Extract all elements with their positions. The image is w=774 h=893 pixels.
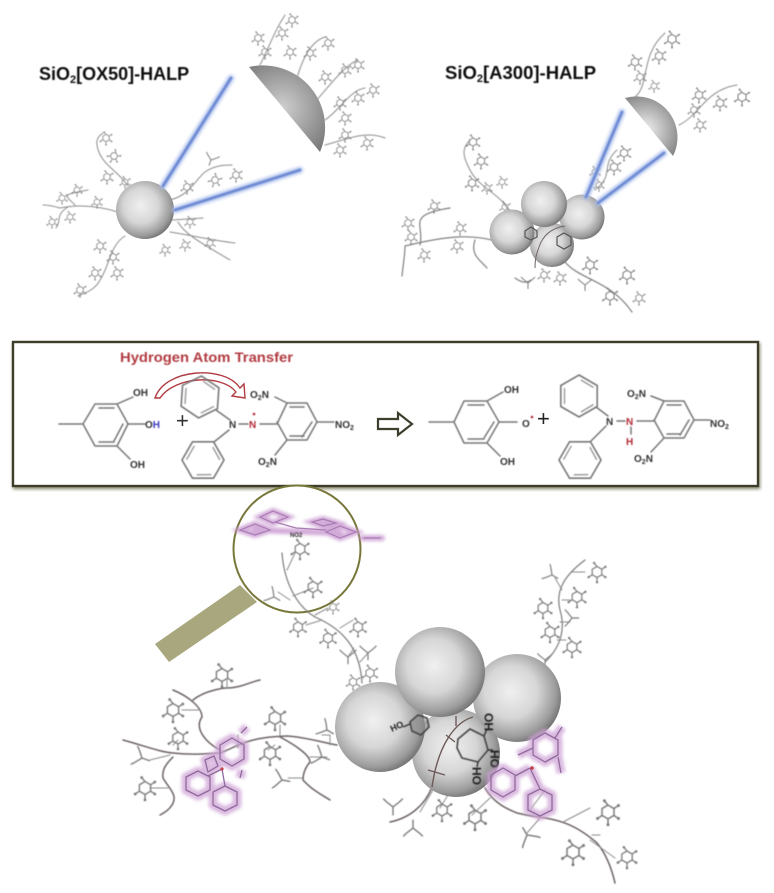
product: DPPH-H: N: [626, 417, 633, 428]
reactant: DPPH radical: N: [262, 390, 269, 401]
panel: magnified aggregate: [123, 486, 637, 883]
product: gallol radical: OH: [500, 457, 515, 468]
polymer chains around aggregate: [402, 30, 750, 312]
reactant: DPPH radical: NO: [335, 420, 350, 431]
heading: SiO2[OX50]-HALP: SiO: [39, 64, 70, 84]
product: DPPH-H: 2: [642, 459, 646, 466]
reactant: DPPH radical: N: [270, 457, 277, 468]
polymer chains on hemisphere: [252, 13, 385, 158]
reactant: gallol: OH: [145, 420, 160, 431]
product: DPPH-H: N: [639, 389, 646, 400]
heading: Hydrogen Atom Transfer: Hydrogen Atom Transfer: [120, 349, 294, 365]
silica aggregate: [490, 181, 604, 268]
reaction arrow: [378, 413, 412, 435]
reactant: DPPH radical: 2: [266, 462, 270, 469]
product: DPPH-H: N: [606, 417, 613, 428]
plus sign: +: [176, 408, 189, 433]
highlighted DPPH in lens: [240, 511, 382, 538]
plus sign: +: [537, 406, 550, 431]
gallol on aggregate: [457, 713, 502, 785]
left polymer network: [123, 663, 338, 815]
right polymer chains: [383, 560, 637, 883]
reactant: DPPH radical: N: [249, 420, 256, 431]
reactant: gallol: OH: [133, 388, 148, 399]
polymer chain through lens: [264, 533, 378, 691]
light beams: [586, 112, 664, 203]
magnifying glass: [155, 486, 360, 662]
reactant: DPPH radical: 2: [350, 425, 354, 432]
light beams: [163, 78, 300, 210]
reactant: DPPH radical: 2: [258, 395, 262, 402]
product: gallol radical: [429, 385, 533, 468]
heading: SiO2[OX50]-HALP: 2: [70, 74, 76, 86]
product: DPPH-H: H: [626, 437, 633, 448]
product: gallol radical: O: [522, 419, 530, 430]
silica aggregate, large: [335, 627, 561, 797]
gallol on aggregate: HO: [482, 713, 496, 731]
product: gallol radical: OH: [504, 385, 519, 396]
product: DPPH-H: NO: [710, 419, 725, 430]
reactant: gallol: [59, 388, 160, 471]
reactant: DPPH radical: N: [229, 420, 236, 431]
hemisphere detector: [249, 65, 325, 152]
curved transfer arrow: [155, 373, 245, 398]
product: DPPH-H: 2: [635, 394, 639, 401]
reactant: DPPH radical: O: [250, 390, 258, 401]
polymer chains around small sphere: [43, 131, 242, 298]
hemisphere detector: [625, 96, 677, 156]
heading: SiO2[A300]-HALP: [A300]-HALP: [483, 62, 596, 83]
gallol on aggregate: OH: [488, 750, 502, 768]
gallol on left sphere: HO: [389, 719, 405, 734]
panel frame: [13, 342, 758, 486]
gallol on aggregate: OH: [470, 767, 484, 785]
heading: SiO2[OX50]-HALP: [OX50]-HALP: [76, 64, 189, 84]
reactant: gallol: OH: [130, 460, 145, 471]
gallol on left sphere: [389, 715, 429, 735]
product: DPPH-H: O: [634, 454, 642, 465]
reactant: DPPH radical: O: [258, 457, 266, 468]
product: DPPH-H: [554, 375, 729, 487]
highlighted DPPH, left: [186, 727, 247, 811]
product: DPPH-H: 2: [725, 424, 729, 431]
panel: SiO2[A300]-HALP: [402, 30, 750, 312]
highlighted DPPH, right: [491, 727, 562, 816]
reactant: DPPH radical: [177, 375, 354, 487]
heading: SiO2[A300]-HALP: 2: [477, 73, 483, 85]
product: DPPH-H: O: [627, 389, 635, 400]
silica nanoparticle: [116, 181, 174, 239]
product: DPPH-H: N: [646, 454, 653, 465]
panel: SiO2[OX50]-HALP: [39, 13, 385, 298]
panel: hydrogen atom transfer reaction: [13, 342, 758, 487]
polymer chain through lens: NO2: [290, 533, 303, 539]
heading: SiO2[A300]-HALP: SiO: [445, 62, 477, 83]
